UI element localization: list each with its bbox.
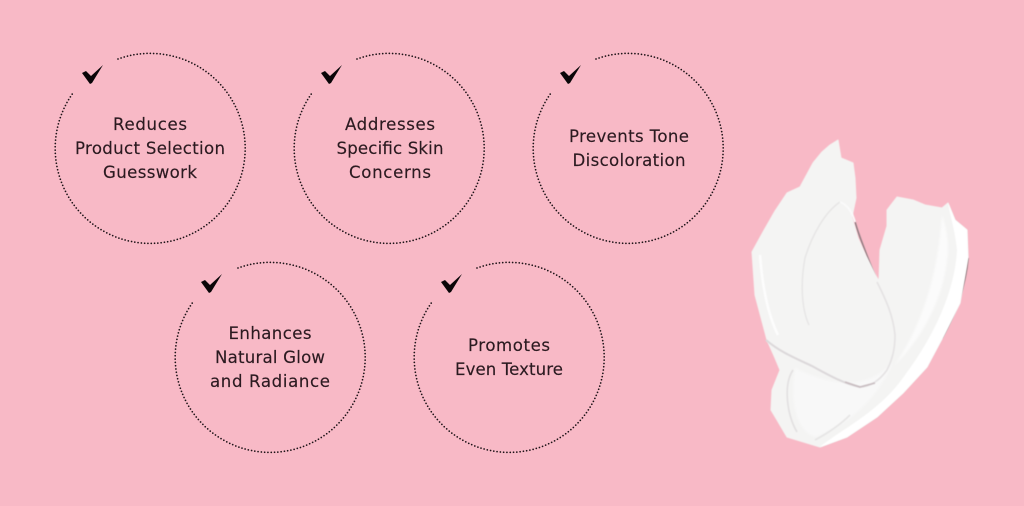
dotted ring 1 (55, 53, 245, 243)
benefit: enhances glow (175, 262, 365, 452)
bright right band (820, 203, 968, 447)
dotted ring 3 (533, 53, 723, 243)
lower scoop (793, 362, 893, 437)
text: even texture: Promotes (468, 336, 550, 355)
text: reduces guesswork: Guesswork (103, 163, 197, 182)
text: prevents discoloration: Discoloration (572, 151, 686, 170)
text: addresses skin concerns: Addresses (345, 115, 435, 134)
fold lines (760, 202, 895, 440)
text: reduces guesswork: Reduces (113, 115, 187, 134)
dotted ring 4 (175, 262, 365, 452)
image: cream smear (752, 140, 968, 447)
text: even texture: Even Texture (455, 360, 563, 379)
cream body (752, 140, 968, 447)
dotted ring 5 (414, 262, 604, 452)
text: enhances glow (210, 324, 330, 391)
text: addresses skin concerns (336, 115, 444, 182)
icon: check mark 2 (321, 65, 342, 84)
benefit: prevents discoloration (533, 53, 723, 243)
benefit: addresses skin concerns (294, 53, 484, 243)
text: addresses skin concerns: Specific Skin (336, 139, 444, 158)
benefit: even texture (414, 262, 604, 452)
highlight streak (895, 215, 948, 365)
icon: check mark 5 (441, 274, 462, 293)
text: prevents discoloration: Prevents Tone (569, 127, 689, 146)
icon: check mark 1 (82, 65, 103, 84)
shadow edges (855, 222, 968, 338)
text: enhances glow: and Radiance (210, 372, 330, 391)
text: enhances glow: Enhances (228, 324, 312, 343)
text: reduces guesswork (75, 115, 225, 182)
icon: check mark 4 (201, 274, 222, 293)
text: prevents discoloration (569, 127, 689, 170)
text: reduces guesswork: Product Selection (75, 139, 225, 158)
text: enhances glow: Natural Glow (215, 348, 325, 367)
icon: check mark 3 (560, 65, 581, 84)
text: even texture (455, 336, 563, 379)
benefit: reduces guesswork (55, 53, 245, 243)
dotted ring 2 (294, 53, 484, 243)
text: addresses skin concerns: Concerns (349, 163, 431, 182)
